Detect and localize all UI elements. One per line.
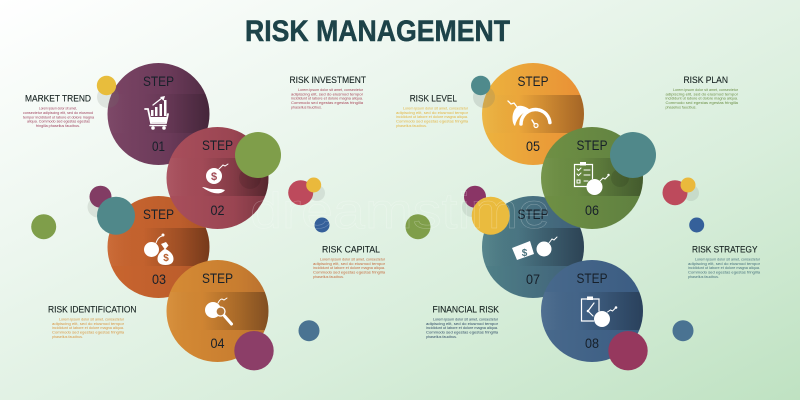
text block: risk strategy: adipiscing elit, sed do eiusmod tempor [688, 261, 761, 266]
text block: market trend: tempor incididunt ut labore et dolore magna [23, 114, 95, 119]
circle 08 [541, 260, 644, 362]
step label 07: STEP [518, 206, 548, 222]
text block: risk plan: incididunt ut labore et dolore magna aliqua. [666, 96, 738, 101]
text block: risk plan: RISK PLAN [684, 74, 728, 85]
text block: financial risk: adipiscing elit, sed do eiusmod tempor [426, 321, 499, 326]
text block: risk level: RISK LEVEL [410, 93, 457, 104]
circle 03 [107, 196, 210, 298]
text block: risk identification: adipiscing elit, sed do eiusmod tempor [52, 321, 125, 326]
panel: step 01 [107, 63, 210, 165]
step label 06: STEP [576, 137, 608, 153]
text block: risk identification: RISK IDENTIFICATION [48, 304, 136, 315]
text block: risk strategy: Lorem ipsum dolor sit amet, consectetur [695, 257, 761, 262]
panel: step 04 [166, 260, 269, 362]
text block: financial risk: FINANCIAL RISK [432, 304, 500, 315]
text block: risk identification: Commodo sed egestas egestas fringilla [52, 330, 125, 335]
text block: risk investment: phasellus faucibus. [291, 104, 322, 109]
number 01: 01 [152, 138, 165, 154]
text block: financial risk: Commodo sed egestas egestas fringilla [426, 330, 499, 335]
text block: financial risk: phasellus faucibus. [426, 334, 457, 339]
circle 02 [166, 127, 269, 229]
text block: risk identification: Lorem ipsum dolor sit amet, consectetur [59, 317, 125, 322]
circle 05 [482, 63, 585, 165]
number 06: 06 [585, 202, 599, 218]
text block: risk capital: RISK CAPITAL [322, 244, 380, 255]
text block: risk identification [48, 304, 136, 339]
watermark: dreamstime [250, 183, 550, 239]
number 02: 02 [210, 202, 225, 218]
text block: market trend: Lorem ipsum dolor sit amet, [39, 106, 77, 110]
text block: market trend: aliqua. Commodo sed egestas egestas [27, 119, 90, 124]
text block: risk plan: Lorem ipsum dolor sit amet, consectetur [673, 87, 739, 92]
step label 05: STEP [518, 73, 548, 89]
text block: market trend [23, 93, 95, 128]
icon: bomb under magnifier [205, 298, 232, 324]
circle 06 [541, 127, 644, 229]
text block: risk capital: adipiscing elit, sed do eiusmod tempor [313, 261, 386, 266]
text block: risk investment: RISK INVESTMENT [290, 74, 366, 85]
text block: risk plan [666, 74, 739, 109]
text block: risk level [396, 93, 469, 128]
text block: risk investment: incididunt ut labore et dolore magna aliqua. [291, 96, 363, 101]
text block: risk investment: Commodo sed egestas egestas fringilla [291, 100, 364, 105]
text block: risk identification: phasellus faucibus. [52, 334, 83, 339]
circle 07 [482, 196, 585, 298]
circle 04 [166, 260, 269, 362]
number 05: 05 [526, 138, 540, 154]
text block: risk capital: incididunt ut labore et dolore magna aliqua. [313, 265, 385, 270]
step label 03: STEP [143, 206, 174, 222]
icon: bomb and money bag: $ [163, 253, 169, 264]
text block: risk plan: phasellus faucibus. [666, 104, 696, 109]
step label 01: STEP [143, 73, 174, 89]
icon: banknote and bomb: $ [522, 248, 528, 259]
panel: step 08 [541, 260, 644, 362]
panel: step 05 [482, 63, 585, 165]
icon: money bomb over hand: $ [211, 171, 217, 183]
step label 08: STEP [576, 270, 608, 286]
number 07: 07 [526, 271, 540, 287]
step label 02: STEP [202, 137, 233, 153]
text block: risk strategy: Commodo sed egestas egestas fringilla [688, 270, 761, 275]
decorative circles, right half [406, 76, 704, 370]
step label 04: STEP [202, 270, 233, 286]
panel: step 06 [541, 127, 644, 229]
icon: checklist and bomb [574, 162, 610, 195]
text block: risk plan: Commodo sed egestas egestas fringilla [666, 100, 739, 105]
text block: financial risk: Lorem ipsum dolor sit amet, consectetur [433, 317, 499, 322]
number 08: 08 [585, 335, 599, 351]
text block: risk level: Lorem ipsum dolor sit amet, consectetur [403, 106, 469, 110]
text block: risk capital: Commodo sed egestas egestas fringilla [313, 270, 386, 275]
text block: risk plan: adipiscing elit, sed do eiusmod tempor [666, 91, 739, 96]
text block: risk strategy: RISK STRATEGY [692, 244, 758, 255]
text block: risk investment: adipiscing elit, sed do eiusmod tempor [291, 91, 364, 96]
text block: risk strategy: incididunt ut labore et dolore magna aliqua. [688, 265, 760, 270]
text block: financial risk: incididunt ut labore et dolore magna aliqua. [426, 325, 498, 330]
text block: risk capital: Lorem ipsum dolor sit amet, consectetur [320, 257, 386, 262]
text block: risk level: Commodo sed egestas egestas fringilla [396, 118, 469, 124]
icon: bomb with gauge [508, 101, 550, 128]
text block: risk level: incididunt ut labore et dolore magna aliqua. [396, 114, 468, 119]
panel: step 03 [107, 196, 210, 298]
text block: market trend: consectetur adipiscing elit, sed do eiusmod [23, 110, 93, 115]
text block: risk level: phasellus faucibus. [396, 123, 427, 128]
text block: risk identification: incididunt ut labore et dolore magna aliqua. [52, 325, 124, 330]
text block: risk investment [290, 74, 366, 109]
circle 01 [107, 63, 210, 165]
panel: step 02 [166, 127, 269, 229]
text block: risk investment: Lorem ipsum dolor sit amet, consectetur [298, 87, 364, 92]
text block: financial risk [426, 304, 500, 339]
icon: shopping cart with growth bars [145, 96, 168, 130]
title: RISK MANAGEMENT [245, 15, 510, 48]
text block: risk capital: phasellus faucibus. [313, 274, 344, 279]
decorative circles, left half [31, 76, 329, 370]
text block: risk strategy: phasellus faucibus. [688, 274, 719, 279]
text block: market trend: MARKET TREND [25, 93, 91, 104]
text block: market trend: fringilla phasellus faucibus. [36, 123, 80, 128]
icon: strategy clipboard and bomb [582, 296, 617, 327]
text block: risk strategy [688, 244, 761, 279]
text block: risk level: adipiscing elit, sed do eiusmod tempor [396, 110, 469, 115]
text block: risk capital [313, 244, 386, 279]
panel: step 07 [482, 196, 585, 298]
number 04: 04 [210, 335, 225, 351]
number 03: 03 [152, 271, 166, 287]
